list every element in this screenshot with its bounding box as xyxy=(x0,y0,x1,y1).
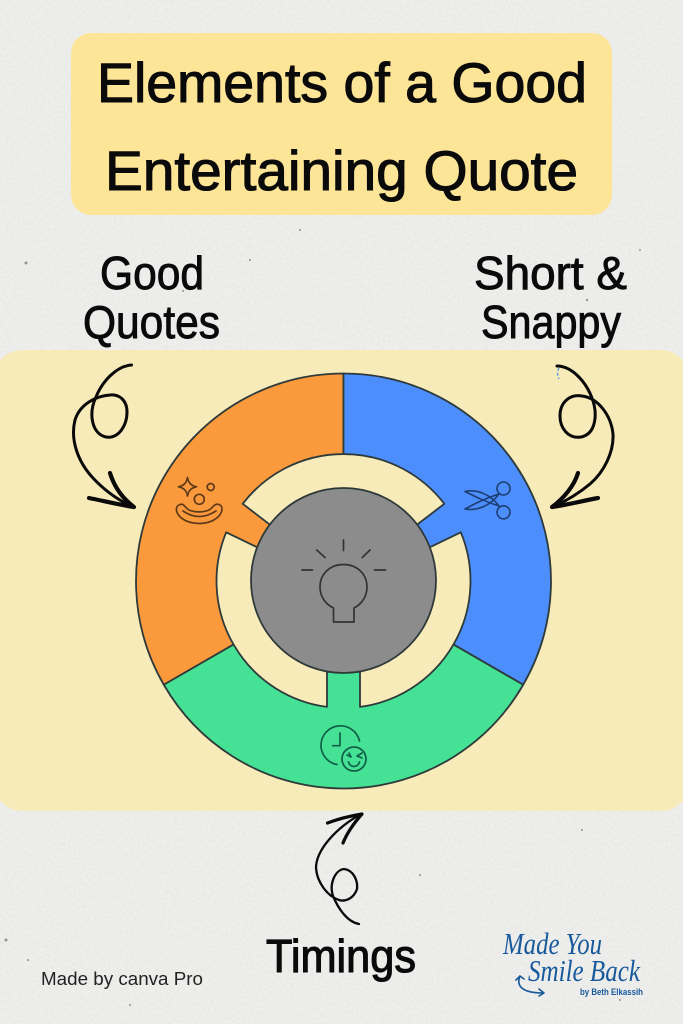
logo: Made You Smile Back xyxy=(502,926,643,997)
label: Short and Snappy xyxy=(474,247,627,348)
label: Good Quotes: Quotes xyxy=(83,296,220,348)
title banner xyxy=(71,33,612,215)
wheel diagram xyxy=(136,374,551,788)
icon: light bulb xyxy=(302,540,386,622)
logo: Made You Smile Back: by Beth Elkassih xyxy=(580,987,643,997)
inner gap: right xyxy=(360,532,470,707)
logo: Made You Smile Back: Smile Back xyxy=(528,953,641,988)
icon: clown face xyxy=(176,478,222,524)
inner gap: left xyxy=(217,532,327,707)
centre circle xyxy=(251,488,436,673)
segment: Timings (green) xyxy=(164,581,523,788)
arrow: Good Quotes to orange segment xyxy=(74,365,134,507)
icon: clock with laughing face xyxy=(321,726,366,771)
segment: Good Quotes (orange) xyxy=(136,374,344,685)
label: Good Quotes xyxy=(83,247,220,348)
small blue mark xyxy=(558,368,559,379)
title line 1: Elements of a Good xyxy=(97,51,587,114)
arrow: Short and Snappy to blue segment xyxy=(552,366,613,507)
credit: Made by canva Pro: Made by canva Pro xyxy=(41,969,203,989)
label: Short and Snappy: Snappy xyxy=(481,296,621,348)
label: Short and Snappy: Short & xyxy=(474,247,627,299)
icon: scissors xyxy=(465,482,510,519)
segment: Short and Snappy (blue) xyxy=(344,374,551,685)
panel: cream background xyxy=(0,350,683,811)
logo: Made You Smile Back: Made You xyxy=(502,926,602,961)
label: Timings: Timings xyxy=(266,930,416,982)
label: Good Quotes: Good xyxy=(100,247,204,299)
title line 2: Entertaining Quote xyxy=(105,139,578,202)
icon: logo curved arrow xyxy=(516,976,544,996)
inner gap: top xyxy=(243,454,444,581)
arrow: Timings to green segment xyxy=(316,814,362,924)
